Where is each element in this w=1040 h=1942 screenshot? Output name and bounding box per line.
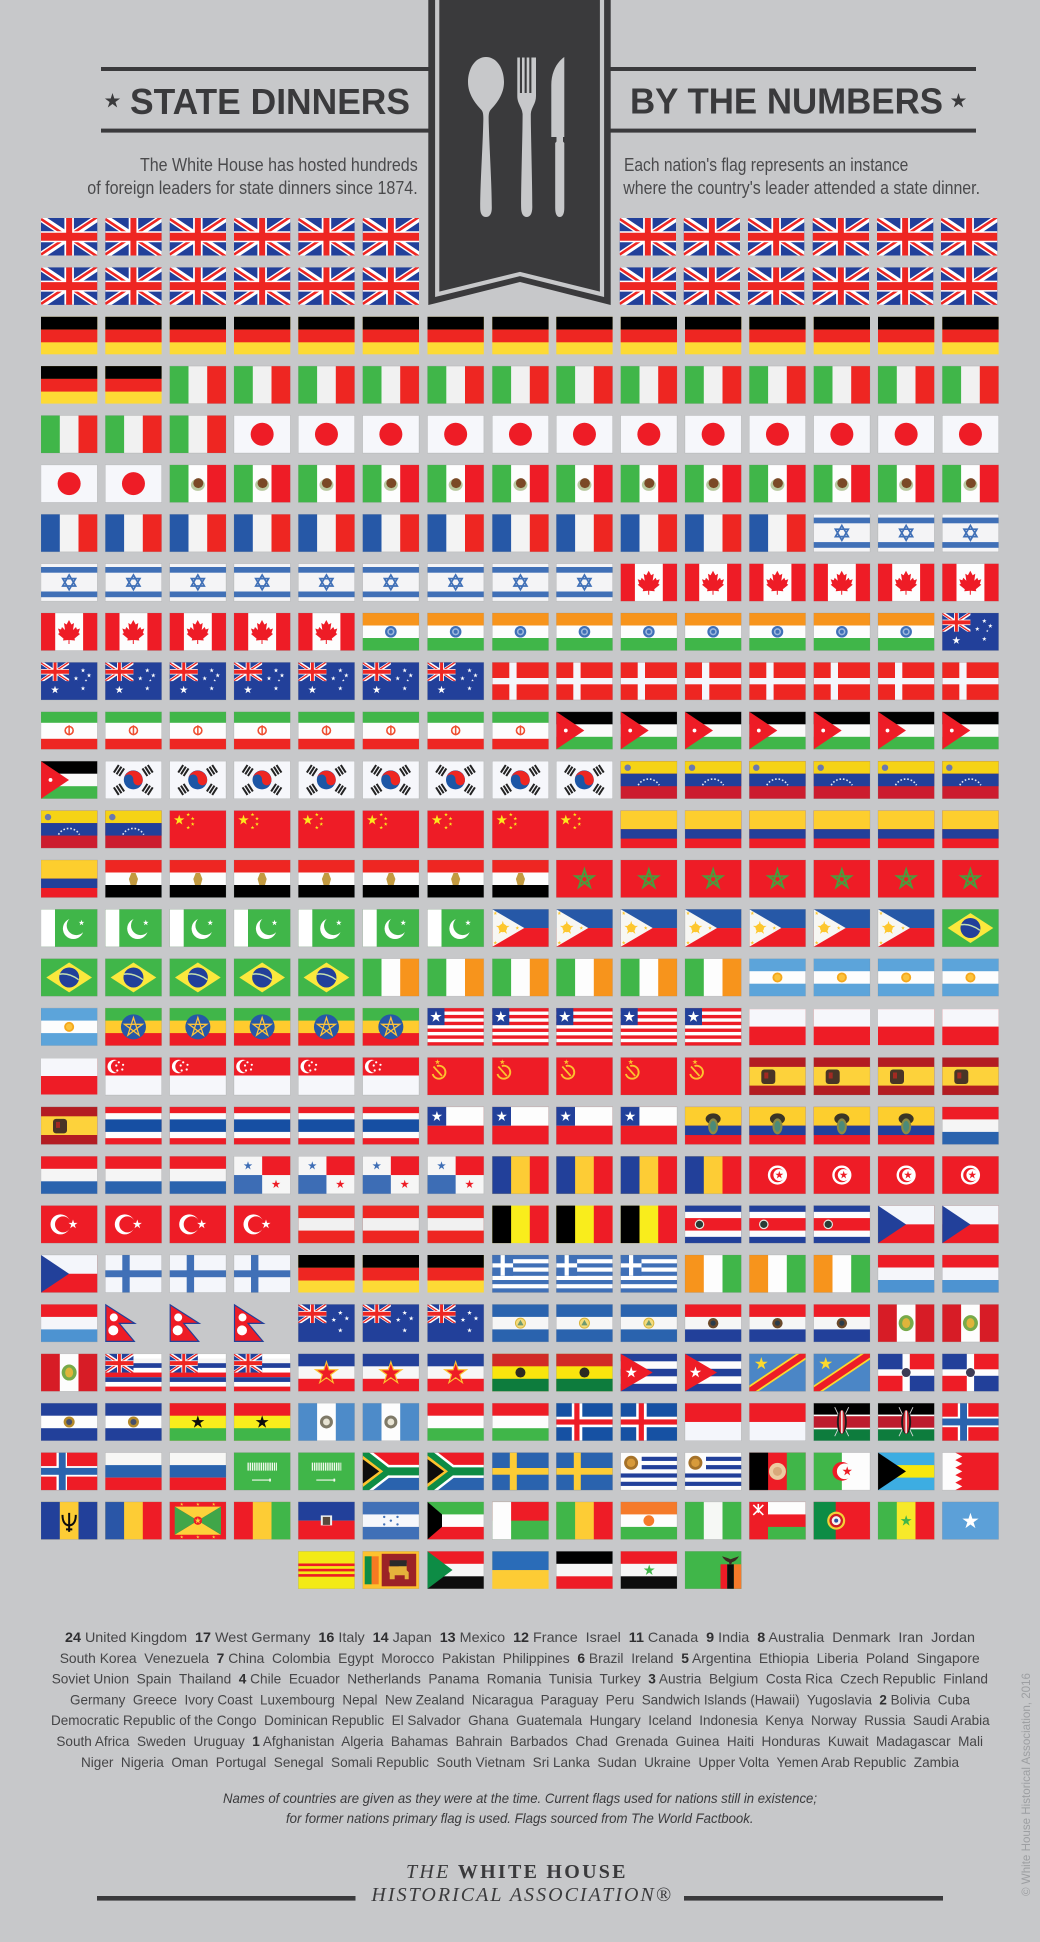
copyright vertical text: © White House Historical Association, 2016	[1019, 1673, 1033, 1896]
flag: Nigeria	[685, 1502, 741, 1539]
flags: Turkey	[41, 1206, 290, 1243]
icon: fork	[517, 58, 536, 217]
flags: United Kingdom (left, row 2)	[41, 266, 419, 306]
country counts list: South Africa Sweden Uruguay 1 Afghanistan Algeria Bahamas Bahrain Barbados Chad Grenada Guinea Haiti Honduras Kuwait Madagascar Mali	[56, 1733, 983, 1749]
flag: Barbados	[41, 1502, 97, 1539]
flags: Greece	[492, 1255, 677, 1292]
country counts list: Democratic Republic of the Congo Dominican Republic El Salvador Ghana Guatemala Hungary Iceland Indonesia Kenya Norway Russia Saudi Arabia	[51, 1712, 990, 1728]
flags: Ecuador	[685, 1107, 934, 1144]
flag: Afghanistan	[749, 1453, 806, 1490]
flags: Czech Republic	[878, 1206, 999, 1243]
flags: Ghana	[170, 1403, 290, 1441]
flags: Guatemala	[298, 1403, 419, 1441]
intro text right: Each nation's flag represents an instance	[624, 155, 908, 175]
logo: White House Historical Association	[97, 1861, 943, 1906]
flags: Philippines	[492, 909, 934, 947]
flag: Argentina continued	[41, 1008, 97, 1046]
flags: Panama	[234, 1156, 484, 1194]
flags: Denmark	[492, 662, 999, 700]
flags: Cuba	[621, 1354, 741, 1391]
icon: knife	[551, 57, 564, 217]
footnote: for former nations primary flag is used. Flags sourced from The World Factbook.	[286, 1810, 754, 1826]
intro text left: The White House has hosted hundreds	[140, 155, 418, 175]
flag: Jordan continued	[41, 761, 97, 799]
flag: Peru continued	[41, 1354, 97, 1391]
flags: United Kingdom (right, row 2)	[620, 266, 997, 306]
banner with cutlery	[428, 0, 611, 305]
flag: Yemen Arab Republic	[621, 1551, 677, 1589]
flag: Netherlands	[942, 1107, 999, 1144]
flags: Austria	[298, 1206, 484, 1243]
flags: Costa Rica	[685, 1206, 870, 1243]
flags: Thailand	[105, 1107, 419, 1144]
flag: Colombia continued	[41, 860, 97, 898]
footnote	[223, 1790, 817, 1826]
flags: China	[170, 811, 613, 848]
header rule: left top	[101, 67, 429, 71]
country counts list	[51, 1629, 990, 1770]
banner ribbon outer	[428, 0, 611, 305]
flags: France	[41, 514, 806, 552]
header rule: right bottom	[610, 129, 976, 133]
flags: Ivory Coast	[685, 1255, 870, 1292]
flag: Ukraine	[492, 1551, 549, 1589]
flag: South Vietnam	[298, 1551, 355, 1589]
flags: New Zealand	[298, 1304, 484, 1342]
flags: Ireland	[363, 959, 741, 996]
flags: India	[363, 613, 934, 650]
header rule: right top	[610, 67, 976, 71]
flags: Iceland	[556, 1403, 677, 1441]
flag: Mali	[556, 1502, 613, 1539]
flags: Japan continued	[41, 465, 162, 502]
flag: Sri Lanka	[363, 1551, 419, 1589]
logo: White House Historical Association: THE WHITE HOUSE	[406, 1861, 626, 1883]
flags: Sandwich Islands (Hawaii)	[105, 1353, 290, 1391]
flags: Germany	[298, 1255, 484, 1292]
flag: Poland continued	[41, 1058, 97, 1094]
flags: Canada	[621, 564, 999, 601]
flags: Brazil continued	[41, 959, 355, 996]
flag: Algeria	[814, 1453, 870, 1490]
flag: Czech Republic continued	[41, 1255, 97, 1292]
flag: Norway continued	[41, 1453, 97, 1490]
country counts list: Niger Nigeria Oman Portugal Senegal Somali Republic South Vietnam Sri Lanka Sudan Ukraine Upper Volta Yemen Arab Republic Zambia	[81, 1754, 959, 1770]
flags: Dominican Republic	[878, 1354, 999, 1391]
flags: Morocco	[556, 860, 999, 898]
flag: Bahrain	[942, 1453, 999, 1490]
icon: left star	[105, 93, 120, 107]
flags: Pakistan	[41, 909, 484, 947]
flags: Russia	[105, 1453, 226, 1490]
flags: Democratic Republic of the Congo	[747, 1352, 872, 1393]
flags: Yugoslavia	[298, 1354, 484, 1391]
flags: Romania	[492, 1156, 741, 1194]
flags: Australia continued	[41, 662, 484, 700]
flags: Kenya	[814, 1403, 934, 1441]
flags: Poland	[749, 1009, 999, 1045]
flag: Bahamas	[878, 1453, 934, 1490]
flags: Netherlands continued	[41, 1156, 226, 1194]
flags: Bolivia	[492, 1354, 613, 1391]
flags: Colombia	[621, 811, 999, 848]
flags: Israel	[814, 514, 999, 552]
flag: Haiti	[298, 1502, 355, 1539]
flags: South Korea	[105, 761, 613, 799]
flags: Peru	[878, 1304, 999, 1342]
flags: Soviet Union	[428, 1058, 741, 1095]
flags: Canada continued	[41, 613, 355, 650]
flags: Finland	[105, 1255, 290, 1292]
flags: El Salvador	[41, 1403, 162, 1441]
flags: Jordan	[556, 712, 999, 749]
country counts list: 24 United Kingdom 17 West Germany 16 Italy 14 Japan 13 Mexico 12 France Israel 11 Canada 9 India 8 Australia Denmark Iran Jordan	[65, 1629, 975, 1645]
flags: United Kingdom (left, row 1)	[41, 217, 419, 256]
flag: Portugal	[814, 1502, 870, 1539]
flags: Ethiopia	[105, 1008, 419, 1046]
flags: Uruguay	[621, 1453, 741, 1490]
icon: spoon	[468, 57, 504, 217]
flags: Venezuela	[621, 761, 999, 799]
flag: Kuwait	[428, 1502, 484, 1539]
flags: Spain	[749, 1058, 999, 1095]
flag: Luxembourg continued	[41, 1304, 97, 1342]
icon: right star	[951, 93, 966, 107]
flags: Hungary	[428, 1403, 549, 1441]
flags: West Germany continued	[41, 366, 162, 404]
flag: Madagascar	[492, 1502, 549, 1539]
heading: by the numbers: BY THE NUMBERS	[630, 80, 943, 122]
flags: Japan	[234, 416, 999, 453]
flag grid	[41, 217, 999, 1589]
footnote: Names of countries are given as they were at the time. Current flags used for nations still in existence;	[223, 1790, 817, 1806]
flag: Chad	[105, 1502, 162, 1539]
country counts list: South Korea Venezuela 7 China Colombia Egypt Morocco Pakistan Philippines 6 Brazil Ireland 5 Argentina Ethiopia Liberia Poland Singapore	[60, 1650, 980, 1666]
flags: Liberia	[428, 1008, 741, 1046]
country counts list: Soviet Union Spain Thailand 4 Chile Ecuador Netherlands Panama Romania Tunisia Turkey 3 Austria Belgium Costa Rica Czech Republic Finland	[52, 1671, 988, 1687]
flag: Sudan	[428, 1551, 484, 1589]
flag: Senegal	[878, 1502, 934, 1539]
flags: Singapore	[105, 1058, 419, 1095]
flag: Niger	[621, 1502, 677, 1539]
flags: Luxembourg	[878, 1255, 999, 1292]
flags: Venezuela continued	[41, 811, 162, 848]
flag: Upper Volta	[556, 1551, 613, 1589]
country counts list: Germany Greece Ivory Coast Luxembourg Nepal New Zealand Nicaragua Paraguay Peru Sandwich Islands (Hawaii) Yugoslavia 2 Bolivia Cuba	[70, 1691, 970, 1707]
flags: Italy continued	[41, 416, 226, 453]
intro text right	[622, 155, 980, 198]
flag: Grenada	[170, 1502, 226, 1539]
flag: Somali Republic	[942, 1502, 999, 1539]
flags: United Kingdom (right, row 1)	[620, 217, 997, 256]
logo: White House Historical Association: HISTORICAL ASSOCIATION®	[370, 1884, 671, 1906]
flag: Guinea	[234, 1502, 290, 1539]
intro text left: of foreign leaders for state dinners since 1874.	[87, 178, 418, 198]
flags: West Germany	[41, 317, 999, 354]
flags: Nicaragua	[492, 1304, 677, 1342]
banner inset line	[437, 0, 602, 294]
flags: Iran	[41, 712, 549, 749]
flags: Belgium	[492, 1206, 677, 1243]
flag: Brazil	[942, 909, 999, 947]
heading: state dinners: STATE DINNERS	[130, 81, 410, 122]
flags: Mexico	[170, 465, 999, 502]
flags: Paraguay	[685, 1304, 870, 1342]
flags: Nepal	[106, 1305, 264, 1341]
flags: Indonesia	[685, 1403, 806, 1441]
flag: Oman	[749, 1502, 806, 1539]
flag: Honduras	[363, 1502, 419, 1539]
flags: South Africa	[361, 1451, 486, 1492]
intro text left	[87, 155, 418, 198]
flags: Israel continued	[41, 564, 613, 601]
flag: Zambia	[685, 1551, 741, 1589]
flag: Spain continued	[41, 1107, 97, 1144]
flags: Italy	[170, 366, 999, 404]
flags: Argentina	[749, 959, 999, 996]
flag: Norway	[942, 1403, 999, 1441]
flags: Tunisia	[749, 1156, 999, 1194]
flags: Chile	[428, 1107, 677, 1144]
header rule: left bottom	[101, 129, 429, 133]
flags: Saudi Arabia	[234, 1453, 355, 1490]
flags: Egypt	[105, 860, 549, 898]
flags: Sweden	[492, 1453, 613, 1490]
flag: Australia	[942, 612, 999, 650]
intro text right: where the country's leader attended a state dinner.	[622, 178, 980, 198]
